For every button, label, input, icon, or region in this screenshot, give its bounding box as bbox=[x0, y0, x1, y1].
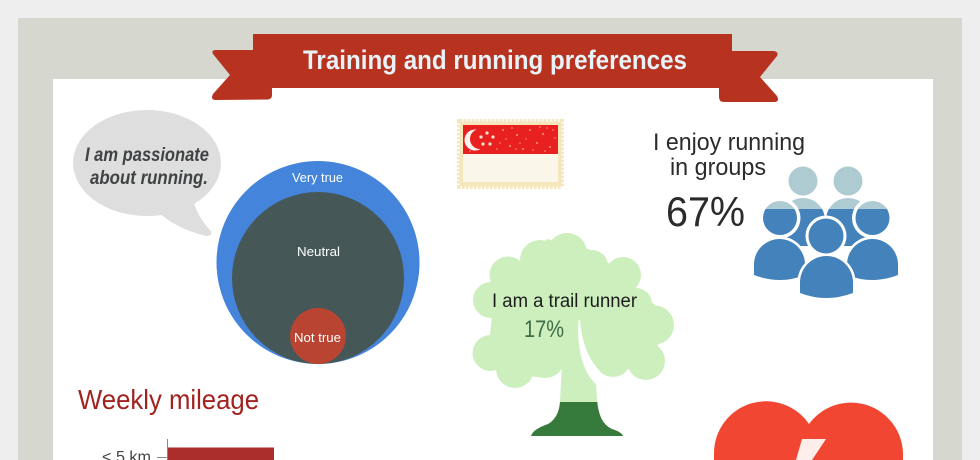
speech bubble bbox=[73, 110, 221, 236]
heading: weekly mileage: Weekly mileage bbox=[78, 384, 259, 415]
icon: Singapore flag stamp bbox=[460, 122, 562, 186]
circle labels: Neutral bbox=[297, 244, 340, 259]
speech bubble text: I am passionate bbox=[85, 145, 209, 166]
group running text: 67% bbox=[666, 188, 745, 235]
tree text: I am a trail runner bbox=[492, 291, 638, 312]
icon: heart with lightning bolt bbox=[714, 401, 903, 460]
speech bubble text bbox=[85, 145, 209, 189]
icon: tree, 17% filled bbox=[472, 233, 674, 436]
nested circle chart: passion for running bbox=[216, 161, 420, 364]
group running text bbox=[653, 129, 805, 235]
title ribbon bbox=[212, 34, 778, 102]
group running text: in groups bbox=[670, 154, 766, 181]
tree text bbox=[492, 291, 638, 343]
panel: white content area bbox=[53, 79, 933, 460]
circle labels: Not true bbox=[294, 330, 341, 345]
title: Training and running preferences bbox=[303, 45, 687, 75]
tree text: 17% bbox=[524, 316, 564, 343]
icon: group of people, 67% filled bbox=[754, 166, 898, 298]
circle labels: Very true bbox=[292, 170, 343, 185]
speech bubble text: about running. bbox=[90, 168, 208, 189]
group running text: I enjoy running bbox=[653, 129, 805, 156]
circle labels bbox=[292, 170, 343, 345]
bar chart: weekly mileage bbox=[102, 439, 274, 460]
